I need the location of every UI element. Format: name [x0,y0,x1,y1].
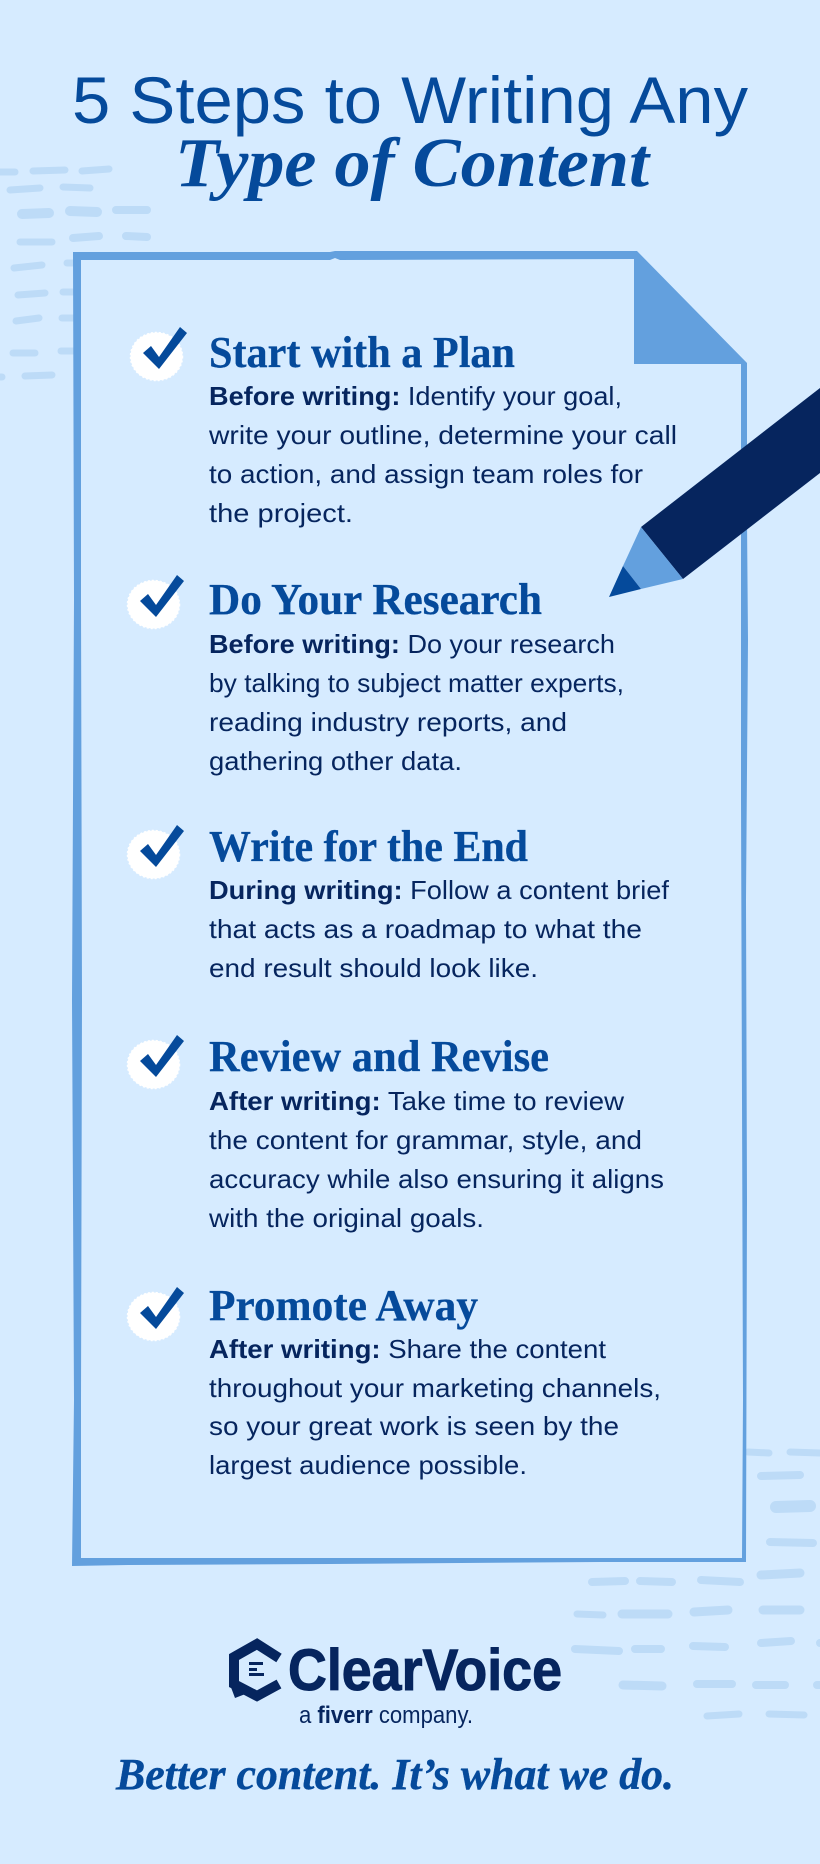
paper sheet outline with folded corner [72,251,748,1566]
body text 1: write your outline, determine your call [208,420,677,450]
step 4: review and revise [128,1032,664,1233]
icon: logo hexagon speech bubble [229,1644,279,1698]
body text 3: end result should look like. [209,953,538,983]
body text 5: throughout your marketing channels, [209,1373,661,1403]
icon: check mark 5 [128,1287,184,1340]
body text 1: Before writing: Identify your goal, [209,381,622,411]
heading 5: Promote Away [209,1281,478,1330]
body text 1: to action, and assign team roles for [209,459,643,489]
body text 5: so your great work is seen by the [209,1411,619,1441]
heading 3: Write for the End [209,822,528,871]
body text 4: After writing: Take time to review [209,1086,624,1116]
body text 1: the project. [209,498,353,528]
body text 4: accuracy while also ensuring it aligns [209,1164,664,1194]
title [72,63,748,202]
body text 1 [208,381,677,528]
body text 3: During writing: Follow a content brief [209,875,670,905]
logo subline: a fiverr company. [299,1702,473,1729]
icon: check mark 3 [128,825,184,878]
body text 3: that acts as a roadmap to what the [209,914,642,944]
pencil [609,388,820,597]
body text 5: largest audience possible. [209,1450,527,1480]
body text 2: reading industry reports, and [209,707,567,737]
icon: check mark 1 [130,327,187,380]
icon: check mark 4 [128,1035,184,1088]
step 5: promote away [128,1281,661,1480]
body text 2: gathering other data. [209,746,462,776]
heading 1: Start with a Plan [209,328,515,377]
icon: check mark 2 [128,575,184,628]
step 3: write for the end [128,822,670,983]
decorative brush dashes: top left [0,169,147,377]
body text 4: the content for grammar, style, and [209,1125,642,1155]
body text 4: with the original goals. [208,1203,484,1233]
step 2: do your research [128,575,624,776]
logo wordmark: ClearVoice [288,1638,562,1703]
body text 4 [208,1086,664,1233]
heading 2: Do Your Research [209,575,542,624]
decorative brush dashes: bottom right [575,1452,820,1716]
tagline: Better content. It’s what we do. [115,1750,674,1799]
title: Type of Content [175,125,652,202]
body text 2: Before writing: Do your research [209,629,615,659]
body text 3 [209,875,670,983]
body text 2: by talking to subject matter experts, [209,668,624,698]
heading 4: Review and Revise [209,1032,549,1081]
step 1: start with a plan [130,327,677,528]
body text 5 [209,1334,661,1480]
title: 5 Steps to Writing Any [72,63,748,137]
body text 5: After writing: Share the content [209,1334,607,1364]
body text 2 [209,629,624,776]
clearvoice logo [229,1638,562,1729]
